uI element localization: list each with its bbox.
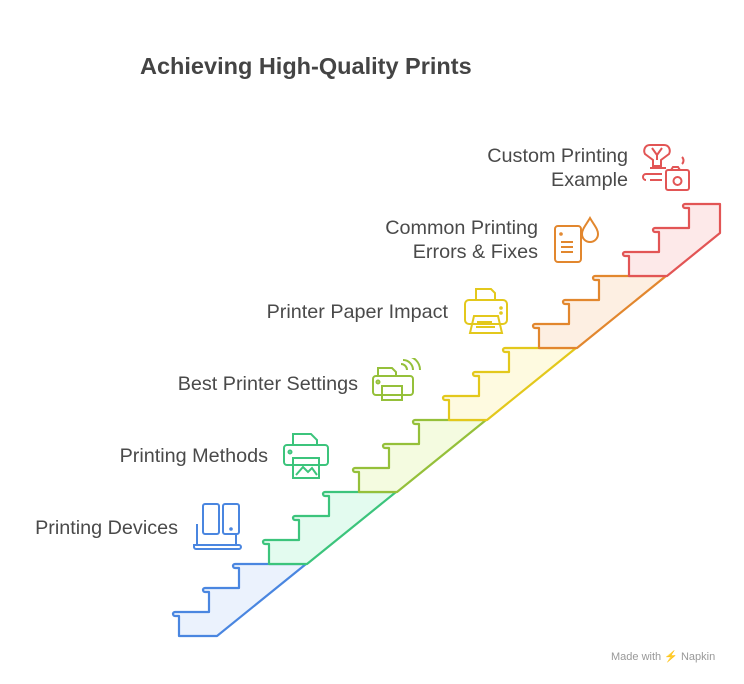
icon: wifi printer <box>372 358 421 401</box>
icon: custom printing <box>642 144 690 191</box>
label: custom printing example: Example <box>551 169 628 191</box>
step: red <box>623 204 720 276</box>
step: blue <box>173 564 306 636</box>
label: common printing errors: Common Printing <box>385 217 538 239</box>
label: common printing errors <box>385 217 538 263</box>
step: yellow <box>443 348 576 420</box>
footer: made with napkin: Made with ⚡ Napkin <box>611 651 715 663</box>
icon: printer paper <box>464 288 508 334</box>
label: printing devices: Printing Devices <box>35 517 178 539</box>
step: lime <box>353 420 486 492</box>
label: custom printing example: Custom Printing <box>487 145 628 167</box>
step: orange <box>533 276 666 348</box>
label: best printer settings: Best Printer Settings <box>178 373 358 395</box>
label: common printing errors: Errors & Fixes <box>413 241 538 263</box>
title: Achieving High-Quality Prints <box>140 53 472 79</box>
icon: printer with image <box>283 433 329 479</box>
label: custom printing example <box>487 145 628 191</box>
step: green <box>263 492 396 564</box>
icon: document with drop <box>554 216 599 263</box>
label: printer paper impact: Printer Paper Impact <box>267 301 448 323</box>
icon: devices <box>193 503 242 550</box>
label: printing methods: Printing Methods <box>120 445 268 467</box>
